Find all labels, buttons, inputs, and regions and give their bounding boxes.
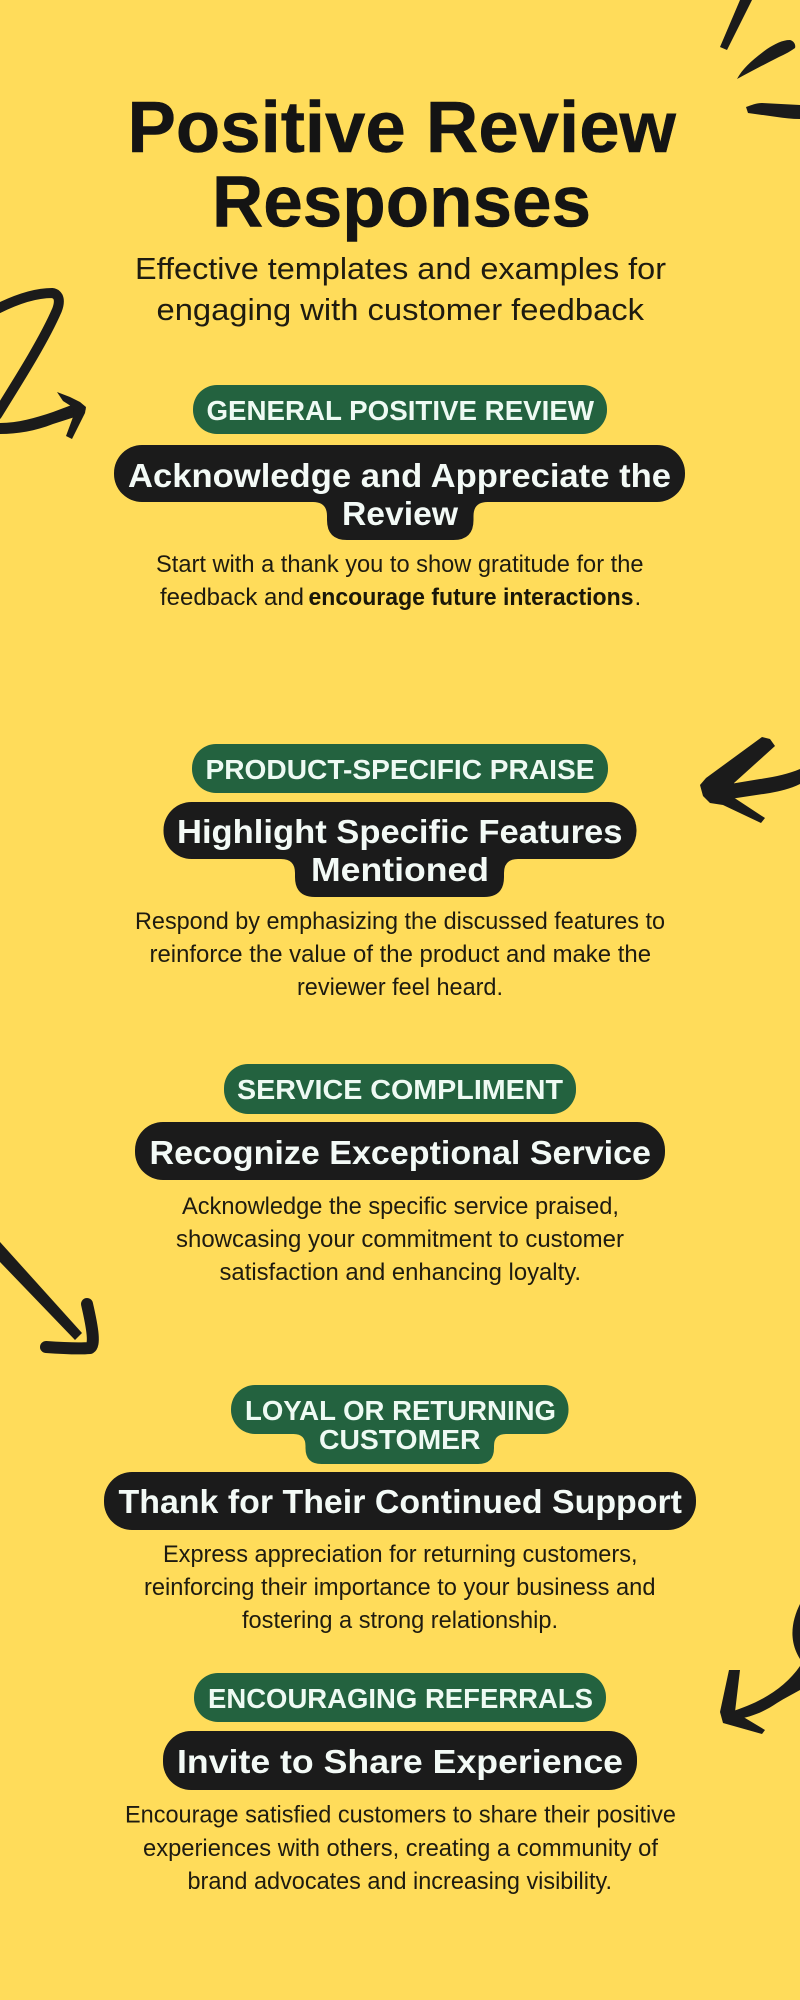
tag: loyal or returning customer: LOYAL OR RETURNING bbox=[245, 1395, 556, 1426]
icon: burst strokes top right bbox=[720, 0, 800, 119]
text block: referrals description: brand advocates and increasing visibility. bbox=[188, 1868, 612, 1895]
heading: highlight specific features mentioned: Mentioned bbox=[311, 851, 489, 888]
tag: service compliment bbox=[224, 1064, 576, 1114]
panel: general positive review bbox=[114, 385, 685, 611]
heading: invite to share experience bbox=[163, 1731, 637, 1790]
panel: service compliment bbox=[135, 1064, 665, 1286]
heading: acknowledge and appreciate the review bbox=[114, 445, 685, 540]
tag: product-specific praise: PRODUCT-SPECIFIC PRAISE bbox=[206, 754, 594, 785]
text block: general description: . bbox=[634, 584, 641, 611]
icon: curved arrow pointing down left, right side bbox=[720, 1604, 800, 1734]
heading: acknowledge and appreciate the review: Review bbox=[342, 495, 458, 532]
tag: loyal or returning customer: CUSTOMER bbox=[319, 1424, 480, 1455]
title bbox=[128, 88, 677, 242]
text block: loyal description bbox=[144, 1541, 656, 1634]
icon: squiggle arrow top left bbox=[0, 293, 86, 439]
text block: loyal description: reinforcing their importance to your business and bbox=[144, 1574, 656, 1601]
heading: highlight specific features mentioned: Highlight Specific Features bbox=[177, 813, 622, 850]
text block: service description: Acknowledge the specific service praised, bbox=[182, 1193, 619, 1220]
text block: product description: reinforce the value of the product and make the bbox=[150, 941, 651, 968]
text block: referrals description: Encourage satisfied customers to share their positive bbox=[125, 1802, 676, 1828]
title: Positive Review bbox=[128, 88, 677, 168]
text block: product description: reviewer feel heard. bbox=[297, 974, 503, 1001]
text block: loyal description: Express appreciation for returning customers, bbox=[163, 1541, 638, 1568]
icon: arrow pointing left, right side bbox=[700, 737, 800, 823]
heading: acknowledge and appreciate the review: Acknowledge and Appreciate the bbox=[128, 457, 671, 494]
text block: loyal description: fostering a strong relationship. bbox=[242, 1607, 558, 1634]
text block: general description: encourage future interactions bbox=[308, 584, 634, 611]
tag: loyal or returning customer bbox=[231, 1385, 568, 1464]
text block: general description bbox=[156, 551, 644, 611]
heading: highlight specific features mentioned bbox=[164, 802, 636, 897]
tag: encouraging referrals bbox=[194, 1673, 606, 1722]
tag: general positive review: GENERAL POSITIVE REVIEW bbox=[206, 395, 595, 426]
text block: general description: feedback and bbox=[160, 584, 304, 611]
text block: referrals description: experiences with others, creating a community of bbox=[143, 1835, 658, 1862]
heading: recognize exceptional service: Recognize Exceptional Service bbox=[150, 1134, 651, 1171]
tag: encouraging referrals: ENCOURAGING REFERRALS bbox=[208, 1683, 593, 1714]
heading: thank for their continued support bbox=[104, 1472, 696, 1530]
title: Responses bbox=[212, 162, 591, 242]
panel: encouraging referrals bbox=[125, 1673, 676, 1895]
heading: thank for their continued support: Thank for Their Continued Support bbox=[118, 1483, 682, 1520]
text block: product description bbox=[135, 908, 665, 1001]
text block: referrals description bbox=[125, 1802, 676, 1895]
icon: arrow pointing down right, left side bbox=[0, 1242, 93, 1348]
subtitle bbox=[135, 251, 666, 327]
heading: invite to share experience: Invite to Share Experience bbox=[177, 1743, 623, 1780]
text block: product description: Respond by emphasizing the discussed features to bbox=[135, 908, 665, 935]
tag: service compliment: SERVICE COMPLIMENT bbox=[237, 1074, 563, 1105]
tag: general positive review bbox=[193, 385, 607, 434]
text block: service description bbox=[176, 1193, 624, 1286]
text block: service description: satisfaction and enhancing loyalty. bbox=[220, 1259, 581, 1286]
text block: general description: Start with a thank you to show gratitude for the bbox=[156, 551, 644, 578]
heading: recognize exceptional service bbox=[135, 1122, 665, 1180]
text block: service description: showcasing your commitment to customer bbox=[176, 1226, 624, 1253]
subtitle: Effective templates and examples for bbox=[135, 251, 666, 286]
panel: loyal or returning customer bbox=[104, 1385, 696, 1634]
tag: product-specific praise bbox=[192, 744, 608, 793]
subtitle: engaging with customer feedback bbox=[156, 292, 645, 327]
panel: product-specific praise bbox=[135, 744, 665, 1001]
